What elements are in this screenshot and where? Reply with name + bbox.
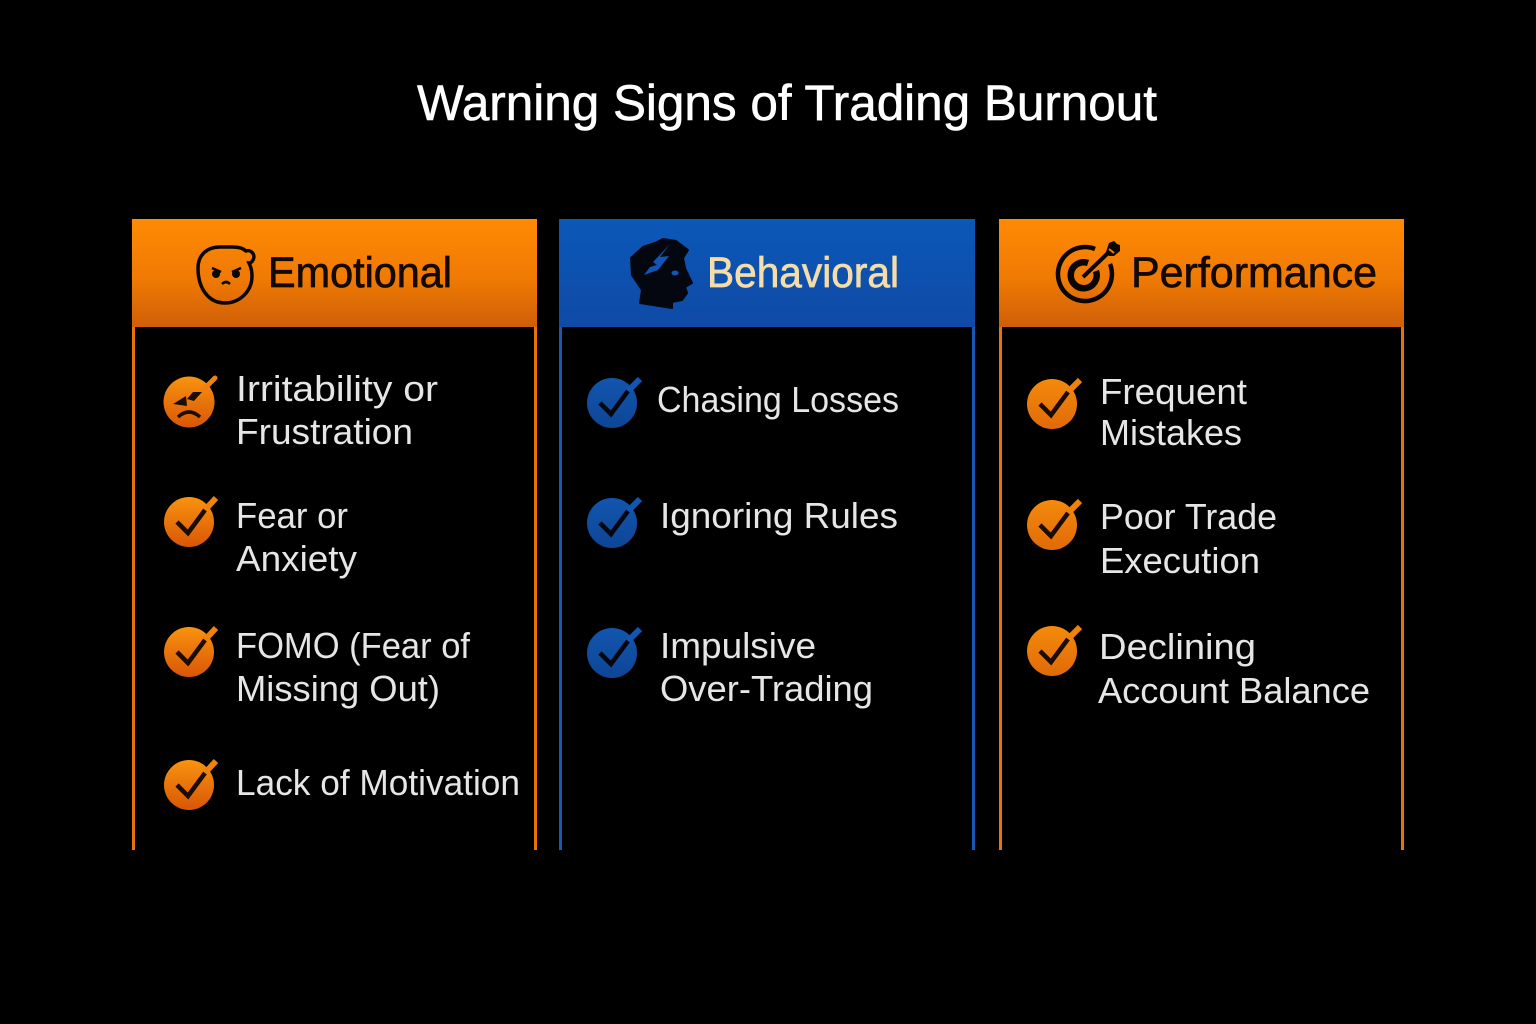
panel frame: performance xyxy=(1000,326,1402,850)
item: poor trade execution: Poor Trade xyxy=(1100,496,1277,537)
item: fomo: FOMO (Fear of xyxy=(236,625,471,666)
icon: check xyxy=(164,760,216,810)
title: Warning Signs of Trading Burnout xyxy=(417,75,1157,131)
item: declining account balance xyxy=(1027,626,1370,711)
item: poor trade execution xyxy=(1027,496,1277,581)
item: impulsive over-trading: Impulsive xyxy=(660,625,816,666)
item: poor trade execution: Execution xyxy=(1100,540,1260,581)
item: frequent mistakes: Frequent xyxy=(1100,371,1247,412)
heading: performance: Performance xyxy=(1131,249,1377,297)
heading: emotional: Emotional xyxy=(268,249,452,297)
item: frequent mistakes xyxy=(1027,371,1247,453)
icon: angry face outline xyxy=(198,247,254,303)
icon: check xyxy=(1027,626,1080,676)
icon: check xyxy=(1027,500,1080,550)
item: lack of motivation: Lack of Motivation xyxy=(236,762,520,803)
item: fomo xyxy=(164,625,471,709)
panel frame: emotional xyxy=(134,326,536,850)
item: impulsive over-trading xyxy=(587,625,873,709)
item: impulsive over-trading: Over-Trading xyxy=(660,668,873,709)
panel: behavioral xyxy=(559,219,975,850)
icon: angry face xyxy=(164,376,215,428)
header: performance xyxy=(999,219,1404,327)
item: chasing losses: Chasing Losses xyxy=(657,379,899,420)
panel: performance xyxy=(999,219,1404,850)
header: emotional xyxy=(132,219,537,327)
item: fear or anxiety xyxy=(164,495,358,579)
heading: behavioral: Behavioral xyxy=(707,249,899,297)
icon: check xyxy=(587,628,640,678)
item: fear or anxiety: Anxiety xyxy=(236,538,358,579)
item: fomo: Missing Out) xyxy=(236,668,440,709)
item: irritability or frustration: Irritability or xyxy=(236,368,438,409)
item: declining account balance: Declining xyxy=(1099,626,1256,667)
item: lack of motivation xyxy=(164,760,520,810)
icon: target with dart xyxy=(1058,241,1120,301)
icon: check xyxy=(1027,379,1080,429)
icon: head with lightning bolt xyxy=(631,239,692,308)
panel: emotional xyxy=(132,219,537,850)
panel frame: behavioral xyxy=(560,326,974,850)
item: ignoring rules: Ignoring Rules xyxy=(660,495,898,536)
item: ignoring rules xyxy=(587,495,898,548)
item: irritability or frustration xyxy=(164,368,438,452)
icon: check xyxy=(587,498,640,548)
item: chasing losses xyxy=(587,378,899,428)
item: irritability or frustration: Frustration xyxy=(236,411,413,452)
icon: check xyxy=(587,378,640,428)
item: fear or anxiety: Fear or xyxy=(236,495,348,536)
item: frequent mistakes: Mistakes xyxy=(1100,412,1242,453)
item: declining account balance: Account Balance xyxy=(1098,670,1370,711)
icon: check xyxy=(164,497,216,547)
header: behavioral xyxy=(559,219,975,327)
icon: check xyxy=(164,627,216,677)
